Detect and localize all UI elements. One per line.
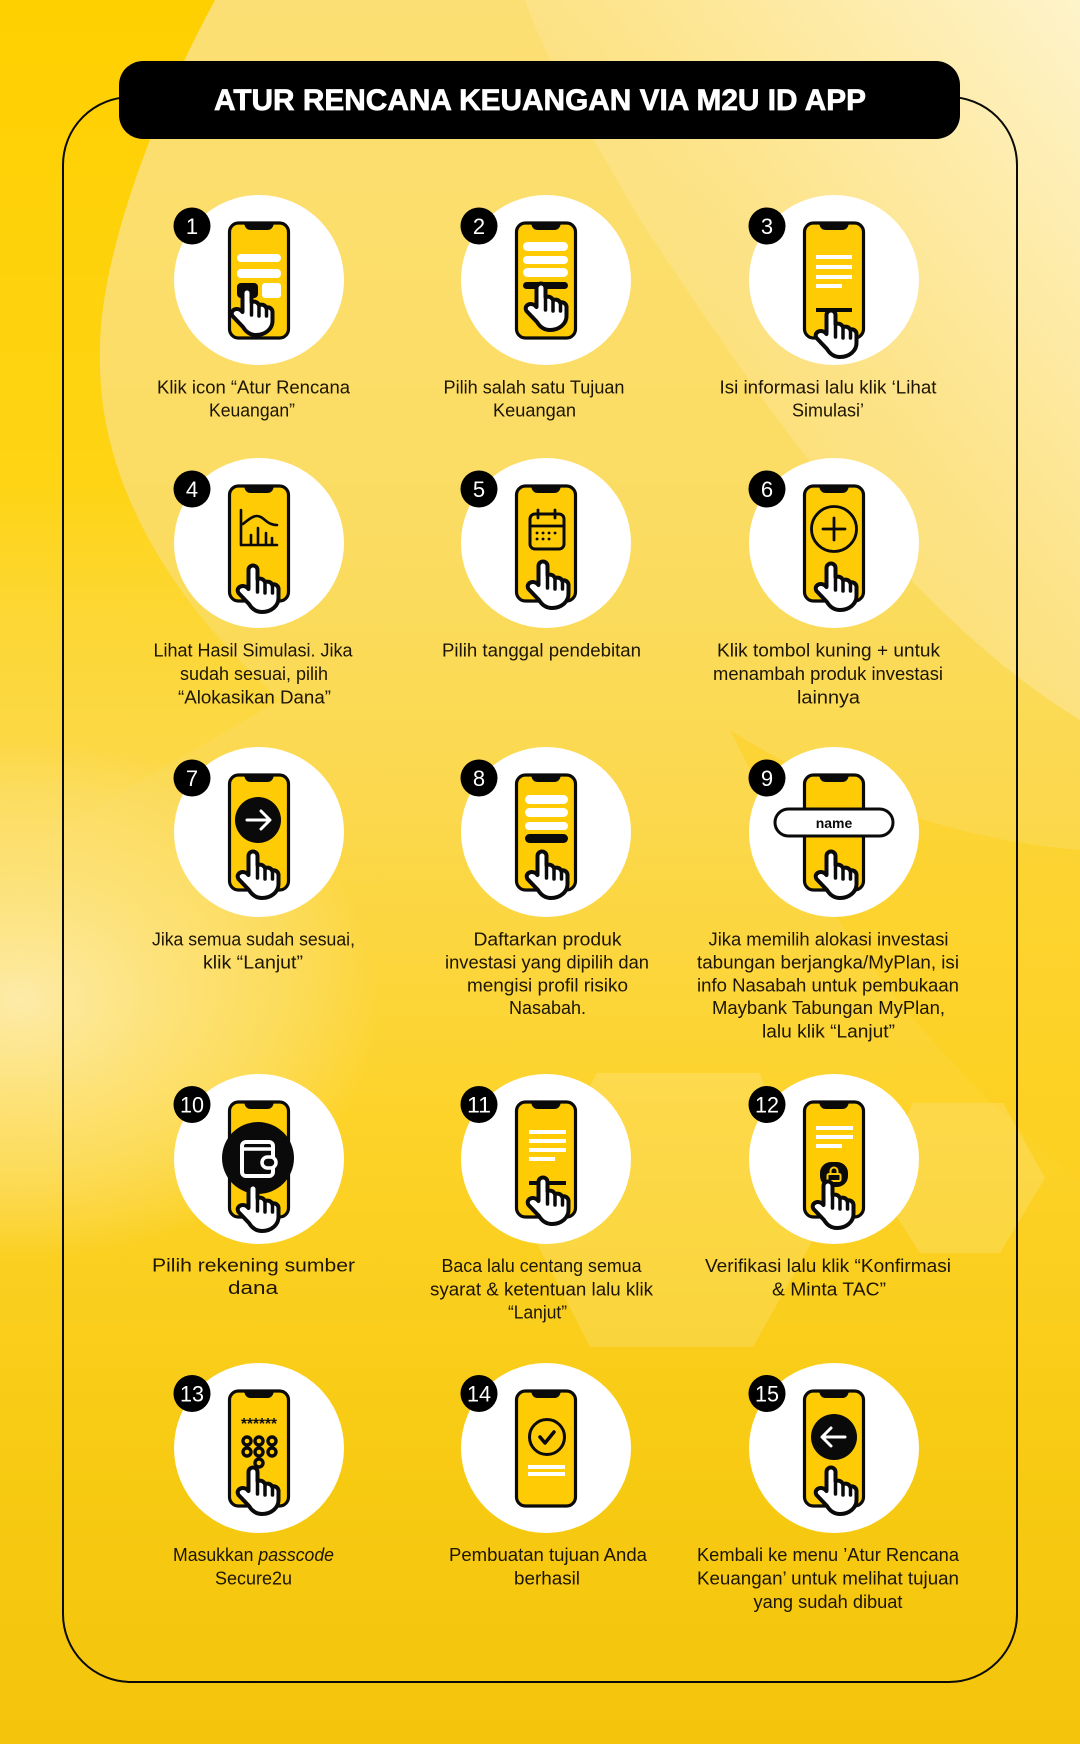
badge 7: 7 <box>186 766 198 791</box>
step 1 <box>157 195 351 420</box>
caption 11 <box>430 1255 654 1322</box>
caption 7: klik “Lanjut” <box>203 952 303 972</box>
caption 15 <box>697 1544 960 1612</box>
caption 10: Pilih rekening sumber <box>152 1254 355 1276</box>
step 8 <box>445 747 649 1018</box>
badge 9: 9 <box>761 766 773 791</box>
badge 6: 6 <box>761 477 773 502</box>
caption 13: Secure2u <box>215 1568 292 1588</box>
icon: phone with success check <box>516 1391 576 1506</box>
title bar <box>119 61 960 139</box>
icon: phone with name field and hand <box>775 775 893 898</box>
caption 11: syarat & ketentuan lalu klik <box>430 1278 654 1300</box>
icon: phone with buttons and hand <box>230 223 288 338</box>
caption 3 <box>720 376 936 420</box>
badge 3: 3 <box>761 214 773 239</box>
badge 7 <box>174 760 210 796</box>
caption 6: menambah produk investasi <box>713 663 943 684</box>
badge 1 <box>174 208 210 244</box>
icon: phone with lock and hand <box>804 1102 864 1228</box>
badge 6 <box>748 470 786 508</box>
badge 5: 5 <box>473 477 485 502</box>
badge 10: 10 <box>180 1092 204 1118</box>
badge 14 <box>460 1375 498 1412</box>
caption 2: Keuangan <box>493 400 576 420</box>
caption 12: & Minta TAC” <box>772 1278 886 1300</box>
caption 6: Klik tombol kuning + untuk <box>717 640 941 660</box>
badge 12 <box>748 1086 786 1123</box>
caption 11: Baca lalu centang semua <box>442 1255 642 1276</box>
icon: phone with keypad and hand <box>230 1391 288 1514</box>
caption 7 <box>152 928 355 972</box>
caption 1 <box>157 376 351 420</box>
badge 8 <box>460 760 498 796</box>
caption 11: “Lanjut” <box>508 1302 567 1322</box>
caption 1: Klik icon “Atur Rencana <box>157 376 351 398</box>
icon: phone with wallet and hand <box>222 1102 294 1231</box>
step 6 <box>713 458 943 708</box>
caption 4: “Alokasikan Dana” <box>178 686 331 708</box>
caption 15: Kembali ke menu ’Atur Rencana <box>697 1544 960 1565</box>
icon: phone with plus button and hand <box>804 486 864 610</box>
caption 8: investasi yang dipilih dan <box>445 952 649 972</box>
icon: phone with chart and hand <box>230 486 288 612</box>
caption 14: berhasil <box>514 1568 580 1588</box>
caption 6 <box>713 640 943 708</box>
badge 8: 8 <box>473 766 485 791</box>
caption 15: yang sudah dibuat <box>754 1591 902 1612</box>
step 12 <box>705 1074 951 1300</box>
badge 15 <box>748 1375 786 1412</box>
caption 3: Simulasi’ <box>792 400 864 420</box>
icon: phone with forward arrow and hand <box>230 775 288 898</box>
caption 8: Daftarkan produk <box>474 928 622 950</box>
caption 4 <box>154 640 353 708</box>
caption 1: Keuangan” <box>209 400 295 420</box>
caption 10: dana <box>228 1277 279 1298</box>
icon: phone with form and hand <box>516 775 576 898</box>
caption 14 <box>449 1544 648 1588</box>
badge 9 <box>748 760 786 796</box>
caption 9: Maybank Tabungan MyPlan, <box>712 997 945 1018</box>
step 15 <box>697 1363 960 1612</box>
step 7 <box>152 747 355 972</box>
step 10 <box>152 1074 355 1298</box>
caption 9: lalu klik “Lanjut” <box>762 1020 895 1042</box>
step 11 <box>430 1074 654 1322</box>
step 2 <box>444 195 631 420</box>
step 9 <box>697 747 959 1042</box>
caption 8 <box>445 928 649 1018</box>
step 13 <box>173 1363 344 1588</box>
badge 11 <box>460 1086 498 1123</box>
icon: phone with calendar and hand <box>516 486 576 608</box>
caption 5: Pilih tanggal pendebitan <box>442 640 641 660</box>
caption 10 <box>152 1254 355 1298</box>
badge 3 <box>748 208 786 244</box>
badge 13: 13 <box>180 1382 204 1406</box>
icon: phone with keypad and hand: ****** <box>241 1416 278 1433</box>
caption 13 <box>173 1544 334 1588</box>
badge 4: 4 <box>186 477 198 502</box>
icon: phone with name field and hand: name <box>816 815 852 831</box>
badge 11: 11 <box>467 1092 491 1118</box>
badge 13 <box>174 1375 210 1412</box>
badge 5 <box>460 470 498 508</box>
caption 14: Pembuatan tujuan Anda <box>449 1544 648 1565</box>
badge 14: 14 <box>467 1382 491 1406</box>
badge 12: 12 <box>755 1092 779 1118</box>
badge 2: 2 <box>473 214 485 239</box>
badge 4 <box>174 470 210 508</box>
icon: phone with terms list and hand <box>516 1102 576 1224</box>
badge 10 <box>174 1086 210 1123</box>
caption 13: Masukkan passcode <box>173 1544 334 1565</box>
caption 2 <box>444 376 624 420</box>
step 3 <box>720 195 936 420</box>
caption 6: lainnya <box>797 686 861 708</box>
step 4 <box>154 458 353 708</box>
caption 8: Nasabah. <box>509 997 586 1018</box>
caption 15: Keuangan’ untuk melihat tujuan <box>697 1568 959 1588</box>
icon: phone with text lines and hand <box>804 223 864 357</box>
caption 4: sudah sesuai, pilih <box>180 663 328 684</box>
icon: phone with list and hand <box>516 223 576 338</box>
badge 15: 15 <box>755 1382 779 1406</box>
caption 9: tabungan berjangka/MyPlan, isi <box>697 952 959 972</box>
caption 4: Lihat Hasil Simulasi. Jika <box>154 640 353 660</box>
icon: phone with back arrow and hand <box>804 1391 864 1514</box>
badge 2 <box>460 208 498 244</box>
badge 1: 1 <box>186 214 198 239</box>
caption 12: Verifikasi lalu klik “Konfirmasi <box>705 1255 951 1276</box>
caption 12 <box>705 1255 951 1300</box>
caption 7: Jika semua sudah sesuai, <box>152 928 355 950</box>
caption 9 <box>697 928 959 1042</box>
caption 9: info Nasabah untuk pembukaan <box>697 974 959 996</box>
step 14 <box>449 1363 648 1588</box>
step 5 <box>442 458 641 660</box>
caption 9: Jika memilih alokasi investasi <box>708 928 948 950</box>
title: ATUR RENCANA KEUANGAN VIA M2U ID APP <box>214 84 866 117</box>
caption 8: mengisi profil risiko <box>467 974 628 996</box>
caption 3: Isi informasi lalu klik ‘Lihat <box>720 376 936 398</box>
caption 2: Pilih salah satu Tujuan <box>444 376 624 398</box>
